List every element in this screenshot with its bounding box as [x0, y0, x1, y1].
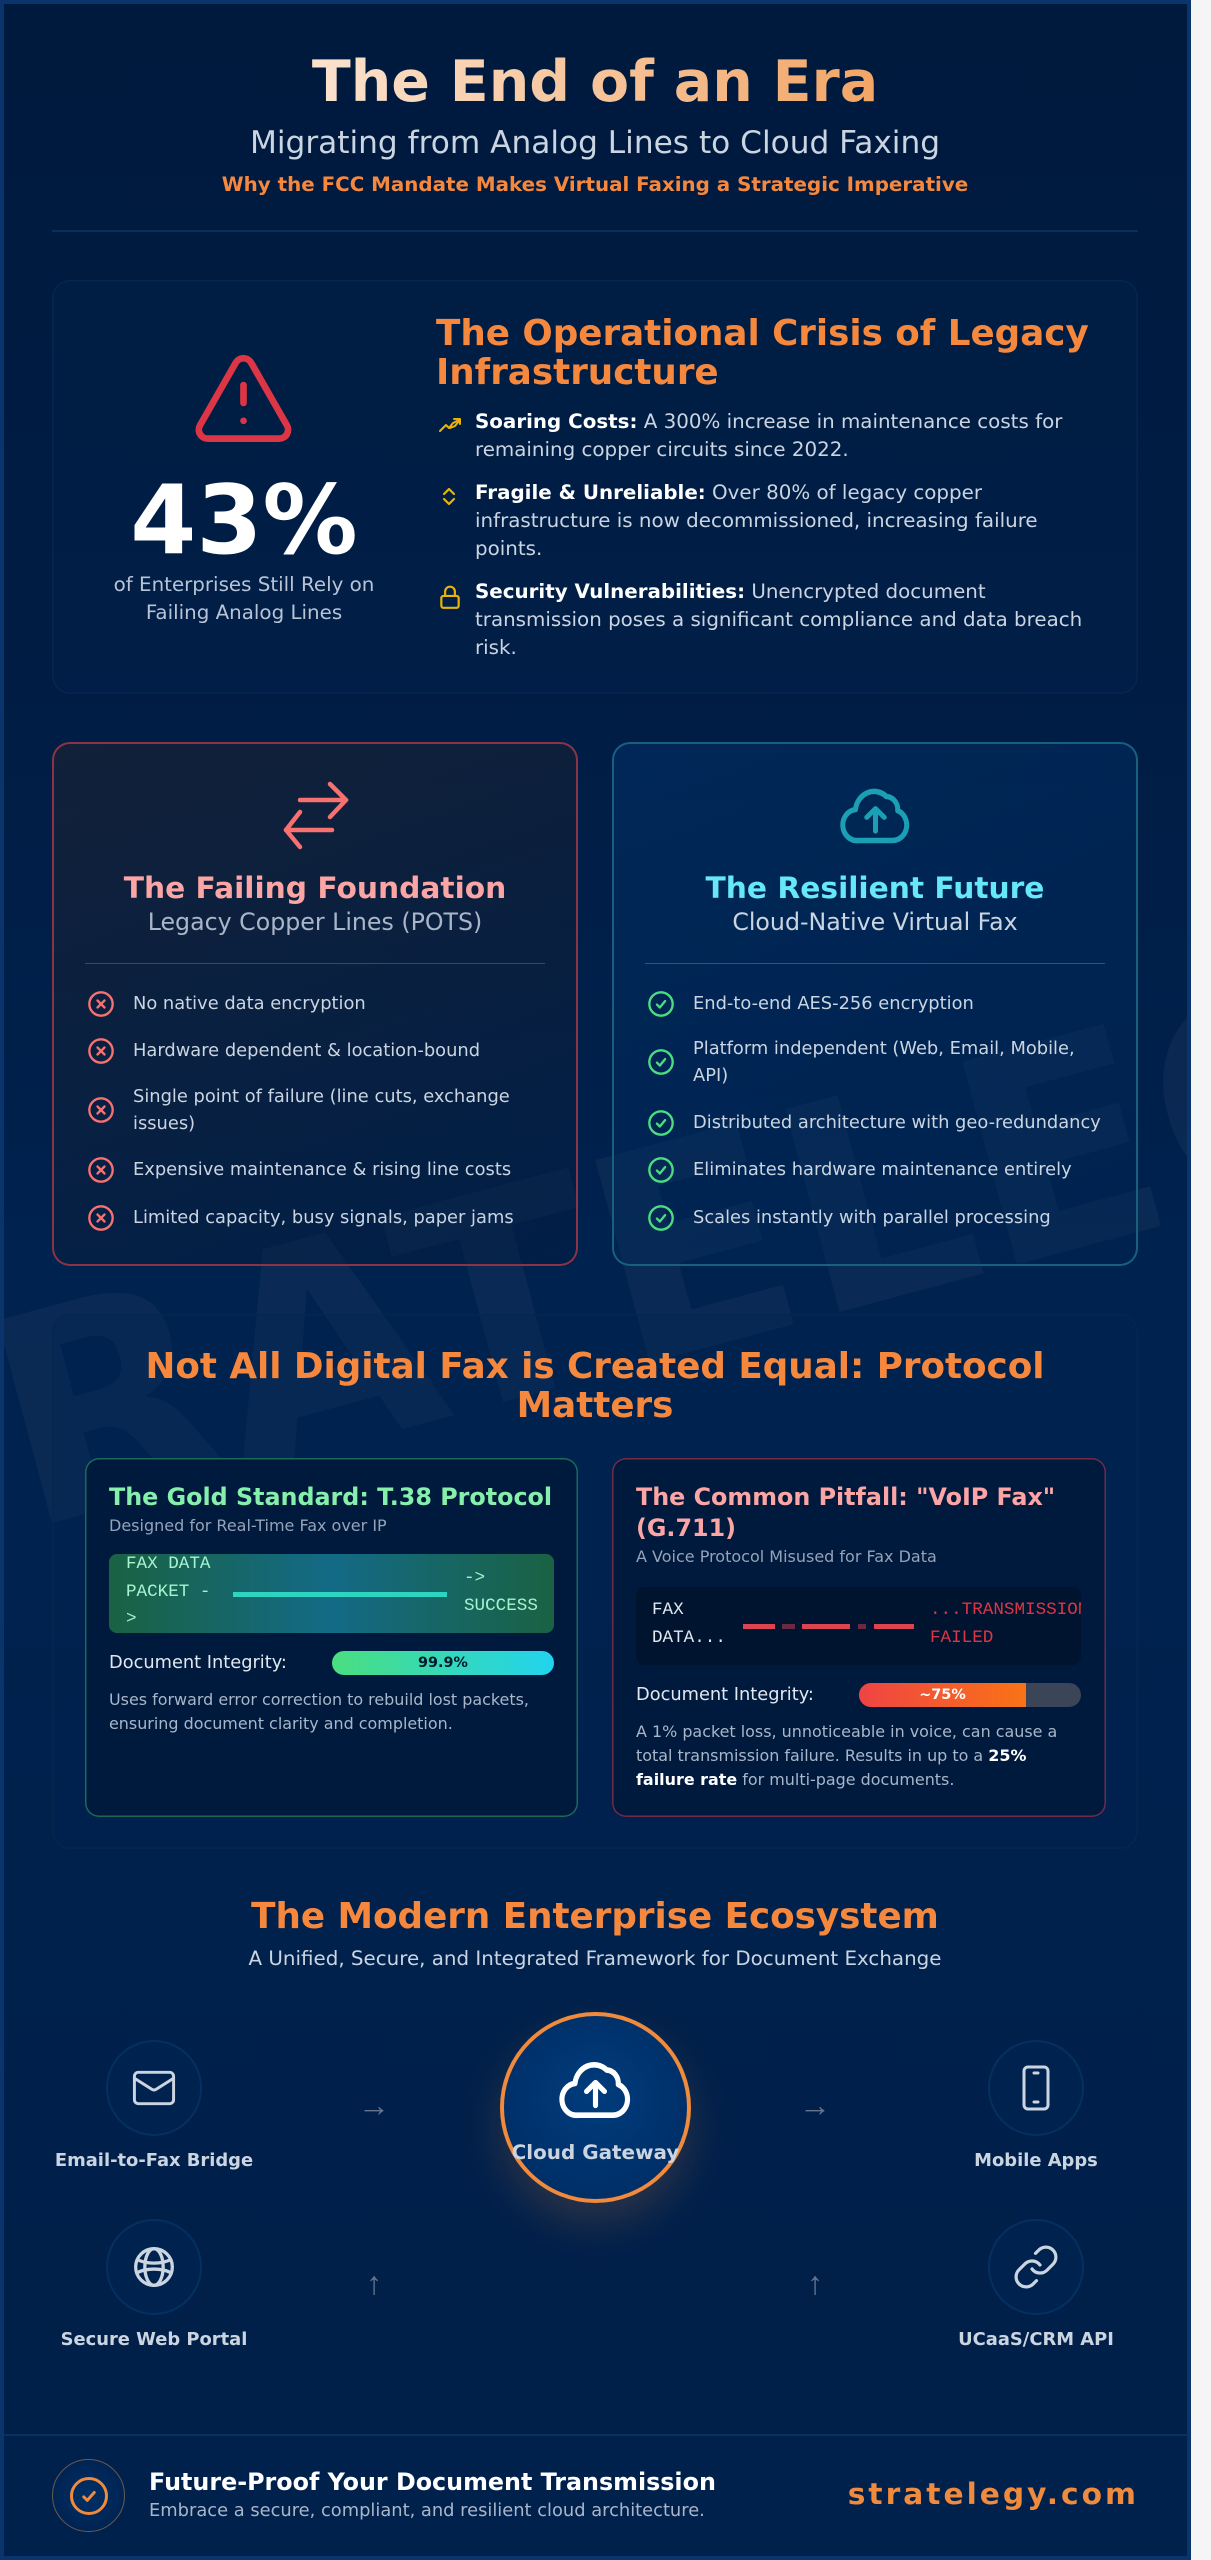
section subheading: A Unified, Secure, and Integrated Framework for Document Exchange — [249, 1947, 941, 1970]
panel: protocol comparison — [52, 1314, 1138, 1849]
node: web portal — [61, 2219, 247, 2350]
item: fragile — [475, 481, 1038, 560]
subtitle: Migrating from Analog Lines to Cloud Faxing — [250, 125, 940, 161]
item: issues) — [133, 1112, 195, 1134]
node: api: UCaaS/CRM API — [958, 2329, 1114, 2350]
panel: operational crisis — [52, 280, 1138, 694]
item: soaring costs: remaining copper circuits since 2022. — [475, 438, 849, 461]
icon: swap arrows — [284, 782, 348, 850]
node: web portal: Secure Web Portal — [61, 2329, 247, 2350]
footer subtext: Embrace a secure, compliant, and resilient cloud architecture. — [149, 2500, 705, 2521]
panel heading: Matters — [517, 1385, 673, 1426]
panel: failing foundation — [52, 742, 578, 1266]
panel heading: Infrastructure — [436, 352, 719, 393]
item: fragile: infrastructure is now decommissioned, increasing failure — [475, 509, 1038, 532]
broken signal — [743, 1624, 914, 1629]
node: email: Email-to-Fax Bridge — [55, 2150, 253, 2171]
node: api — [958, 2219, 1114, 2350]
integrity bar 99.9% — [332, 1651, 554, 1675]
heading: The Failing Foundation — [124, 871, 506, 906]
right label — [930, 1600, 1081, 1648]
item: security: transmission poses a significant compliance and data breach — [475, 608, 1082, 631]
item: Scales instantly with parallel processing — [693, 1207, 1051, 1228]
footer heading: Future-Proof Your Document Transmission — [149, 2468, 716, 2496]
integrity label: Document Integrity: — [636, 1684, 814, 1705]
arrow: → — [799, 2087, 831, 2123]
section heading: The Modern Enterprise Ecosystem — [251, 1896, 939, 1937]
left label: PACKET - — [126, 1582, 210, 1602]
left label — [126, 1554, 210, 1629]
item — [88, 1086, 510, 1134]
tagline: Why the FCC Mandate Makes Virtual Faxing a Strategic Imperative — [222, 173, 968, 196]
section: ecosystem — [55, 1896, 1114, 2350]
item: security: Security Vulnerabilities: Unencrypted document — [475, 580, 986, 603]
panel heading — [146, 1346, 1044, 1426]
left label — [652, 1600, 726, 1648]
hub label: Cloud Gateway — [512, 2140, 679, 2164]
item: Distributed architecture with geo-redundancy — [693, 1112, 1101, 1133]
card subtitle: A Voice Protocol Misused for Fax Data — [636, 1547, 937, 1566]
right label: SUCCESS — [464, 1596, 538, 1616]
icon: cloud upload — [559, 2062, 630, 2118]
heading: The Resilient Future — [706, 871, 1044, 906]
header: title block — [222, 48, 968, 196]
packet flow diagram — [636, 1587, 1081, 1665]
panel heading: Not All Digital Fax is Created Equal: Protocol — [146, 1346, 1044, 1387]
item: soaring costs — [475, 410, 1062, 461]
item — [88, 991, 366, 1017]
arrow: ↑ — [807, 2265, 823, 2301]
description — [636, 1722, 1057, 1789]
description: A 1% packet loss, unnoticeable in voice, can cause a — [636, 1722, 1057, 1741]
item: security: risk. — [475, 636, 517, 659]
icon: trend up — [439, 418, 461, 432]
node: email — [55, 2040, 253, 2171]
item: security — [475, 580, 1082, 659]
item: soaring costs: Soaring Costs: A 300% increase in maintenance costs for — [475, 410, 1062, 433]
title — [52, 42, 1138, 122]
card: T.38 — [85, 1458, 578, 1817]
integrity bar 99.9%: 99.9% — [418, 1655, 468, 1671]
panel heading — [436, 313, 1089, 393]
item — [648, 991, 974, 1017]
big stat 43%: 43% — [130, 466, 358, 576]
item: Single point of failure (line cuts, exchange — [133, 1086, 510, 1106]
left label: FAX DATA — [126, 1554, 210, 1574]
signal line — [233, 1592, 447, 1596]
panel heading: The Operational Crisis of Legacy — [436, 313, 1089, 354]
item: Eliminates hardware maintenance entirely — [693, 1159, 1072, 1180]
arrow: ↑ — [366, 2265, 382, 2301]
description: Uses forward error correction to rebuild lost packets, — [109, 1690, 529, 1709]
stat caption: of Enterprises Still Rely on — [114, 573, 374, 596]
brand url: stratelegy.com — [848, 2477, 1139, 2512]
right label: FAILED — [930, 1628, 993, 1648]
arrow: → — [358, 2087, 390, 2123]
card title: (G.711) — [636, 1514, 736, 1542]
stat caption — [114, 573, 374, 624]
icon: cloud upload — [840, 788, 910, 844]
description: ensuring document clarity and completion. — [109, 1714, 453, 1733]
packet flow diagram — [109, 1554, 554, 1633]
item: Expensive maintenance & rising line costs — [133, 1159, 511, 1180]
subheading: Cloud-Native Virtual Fax — [732, 908, 1018, 936]
card title: The Common Pitfall: "VoIP Fax" — [636, 1483, 1055, 1511]
card title: The Gold Standard: T.38 Protocol — [109, 1483, 552, 1511]
icon: chevrons — [442, 488, 456, 506]
node: mobile: Mobile Apps — [974, 2150, 1098, 2171]
item: API) — [693, 1065, 728, 1086]
description: failure rate for multi-page documents. — [636, 1770, 954, 1789]
item: fragile: points. — [475, 537, 542, 560]
card: G.711 — [612, 1458, 1106, 1817]
item: End-to-end AES-256 encryption — [693, 993, 974, 1014]
integrity label: Document Integrity: — [109, 1652, 287, 1673]
stat caption: Failing Analog Lines — [146, 601, 342, 624]
item: fragile: Fragile & Unreliable: Over 80% of legacy copper — [475, 481, 982, 504]
left label: > — [126, 1609, 137, 1629]
title: The End of an Era — [312, 48, 878, 114]
footer — [0, 2434, 1191, 2560]
icon: lock — [440, 586, 460, 609]
item: Limited capacity, busy signals, paper jams — [133, 1207, 514, 1228]
item: No native data encryption — [133, 993, 366, 1014]
description: total transmission failure. Results in up to a 25% — [636, 1746, 1026, 1765]
icon: check badge — [52, 2459, 125, 2532]
item: Platform independent (Web, Email, Mobile, — [693, 1038, 1075, 1059]
card title — [636, 1483, 1055, 1542]
right label: -> — [464, 1568, 485, 1588]
description — [109, 1690, 529, 1733]
bar fill — [859, 1683, 1026, 1707]
subheading: Legacy Copper Lines (POTS) — [148, 908, 482, 936]
integrity bar 75% — [859, 1683, 1081, 1707]
right label — [464, 1568, 538, 1616]
panel: resilient future — [612, 742, 1138, 1266]
icon: warning triangle — [196, 355, 292, 442]
item: Hardware dependent & location-bound — [133, 1040, 480, 1061]
bar fill: ~75% — [919, 1687, 966, 1703]
left label: FAX — [652, 1600, 684, 1620]
hub: cloud gateway — [500, 2012, 691, 2203]
item — [648, 1038, 1075, 1086]
left label: DATA... — [652, 1628, 726, 1648]
card subtitle: Designed for Real-Time Fax over IP — [109, 1516, 387, 1535]
node: mobile — [974, 2040, 1098, 2171]
